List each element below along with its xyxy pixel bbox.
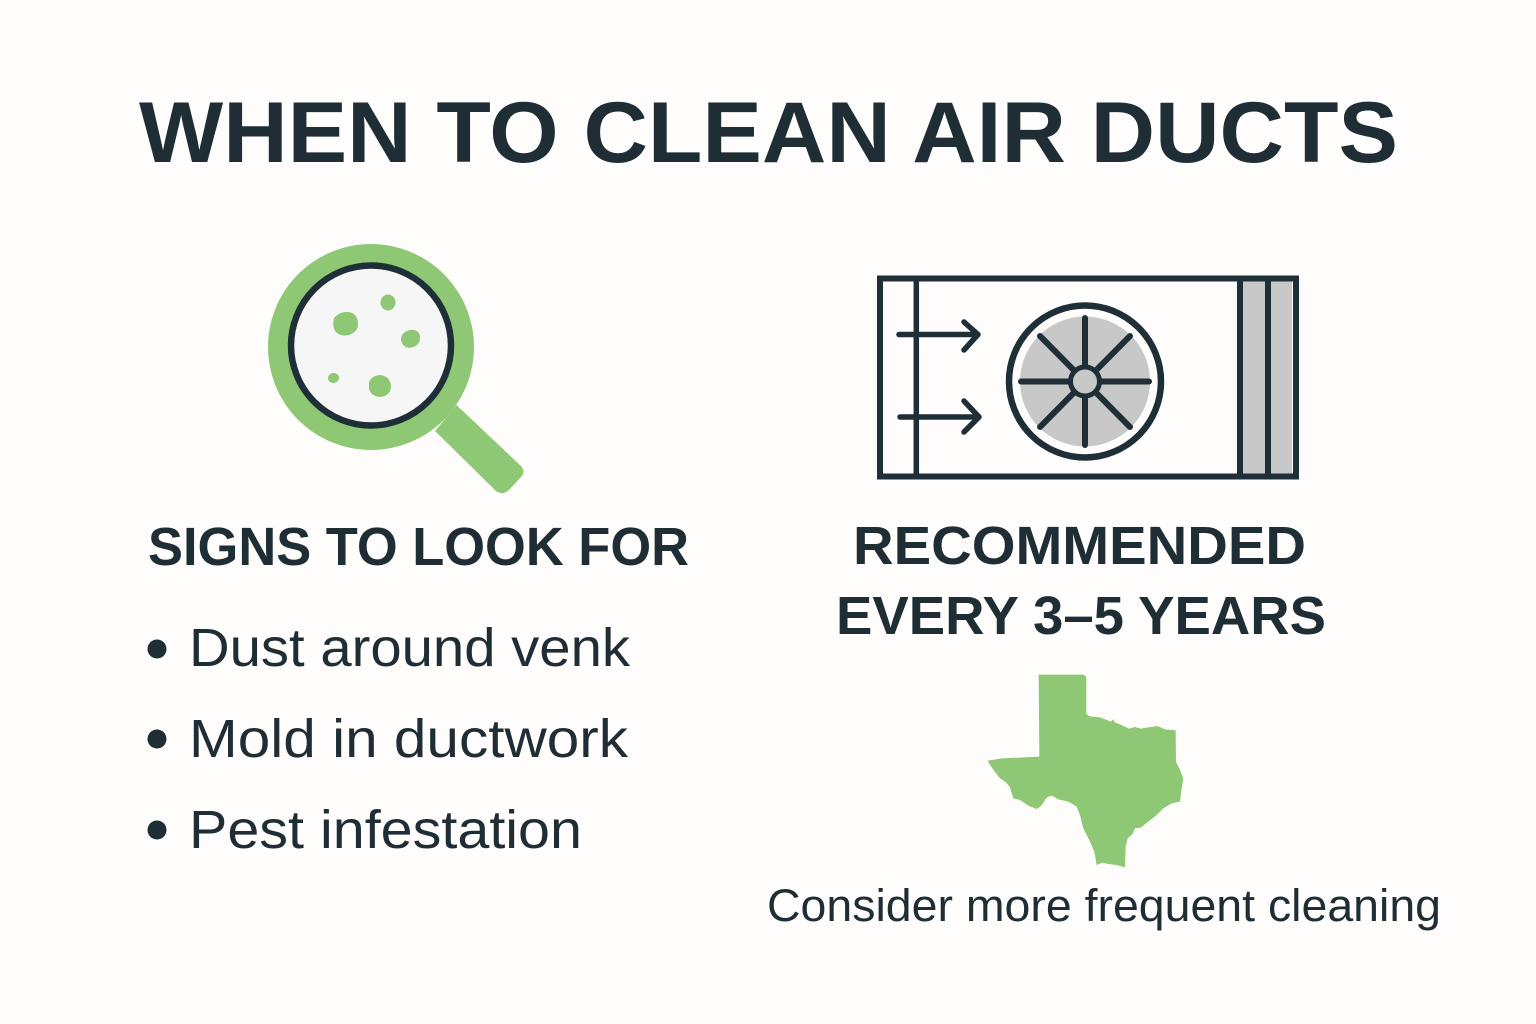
bullet list: Dust around venk bbox=[189, 618, 631, 678]
bullet list: Mold in ductwork bbox=[189, 709, 629, 769]
icon: air duct with fan bbox=[880, 278, 1296, 477]
heading: signs to look for: SIGNS TO LOOK FOR bbox=[148, 517, 689, 577]
heading: recommended every 3-5 years bbox=[836, 516, 1326, 646]
panel: signs to look for bbox=[148, 244, 689, 860]
caption: consider more frequent cleaning: Consider more frequent cleaning bbox=[767, 880, 1441, 931]
bullet list bbox=[148, 618, 631, 860]
panel: recommended frequency bbox=[767, 278, 1441, 931]
icon: Texas state map bbox=[988, 675, 1183, 867]
icon: magnifying glass with mold spots bbox=[268, 244, 524, 493]
bullet list: Pest infestation bbox=[189, 800, 582, 860]
heading: recommended every 3-5 years: RECOMMENDED bbox=[853, 516, 1306, 576]
heading: recommended every 3-5 years: EVERY 3–5 YEARS bbox=[836, 586, 1326, 646]
title: WHEN TO CLEAN AIR DUCTS bbox=[139, 85, 1398, 181]
